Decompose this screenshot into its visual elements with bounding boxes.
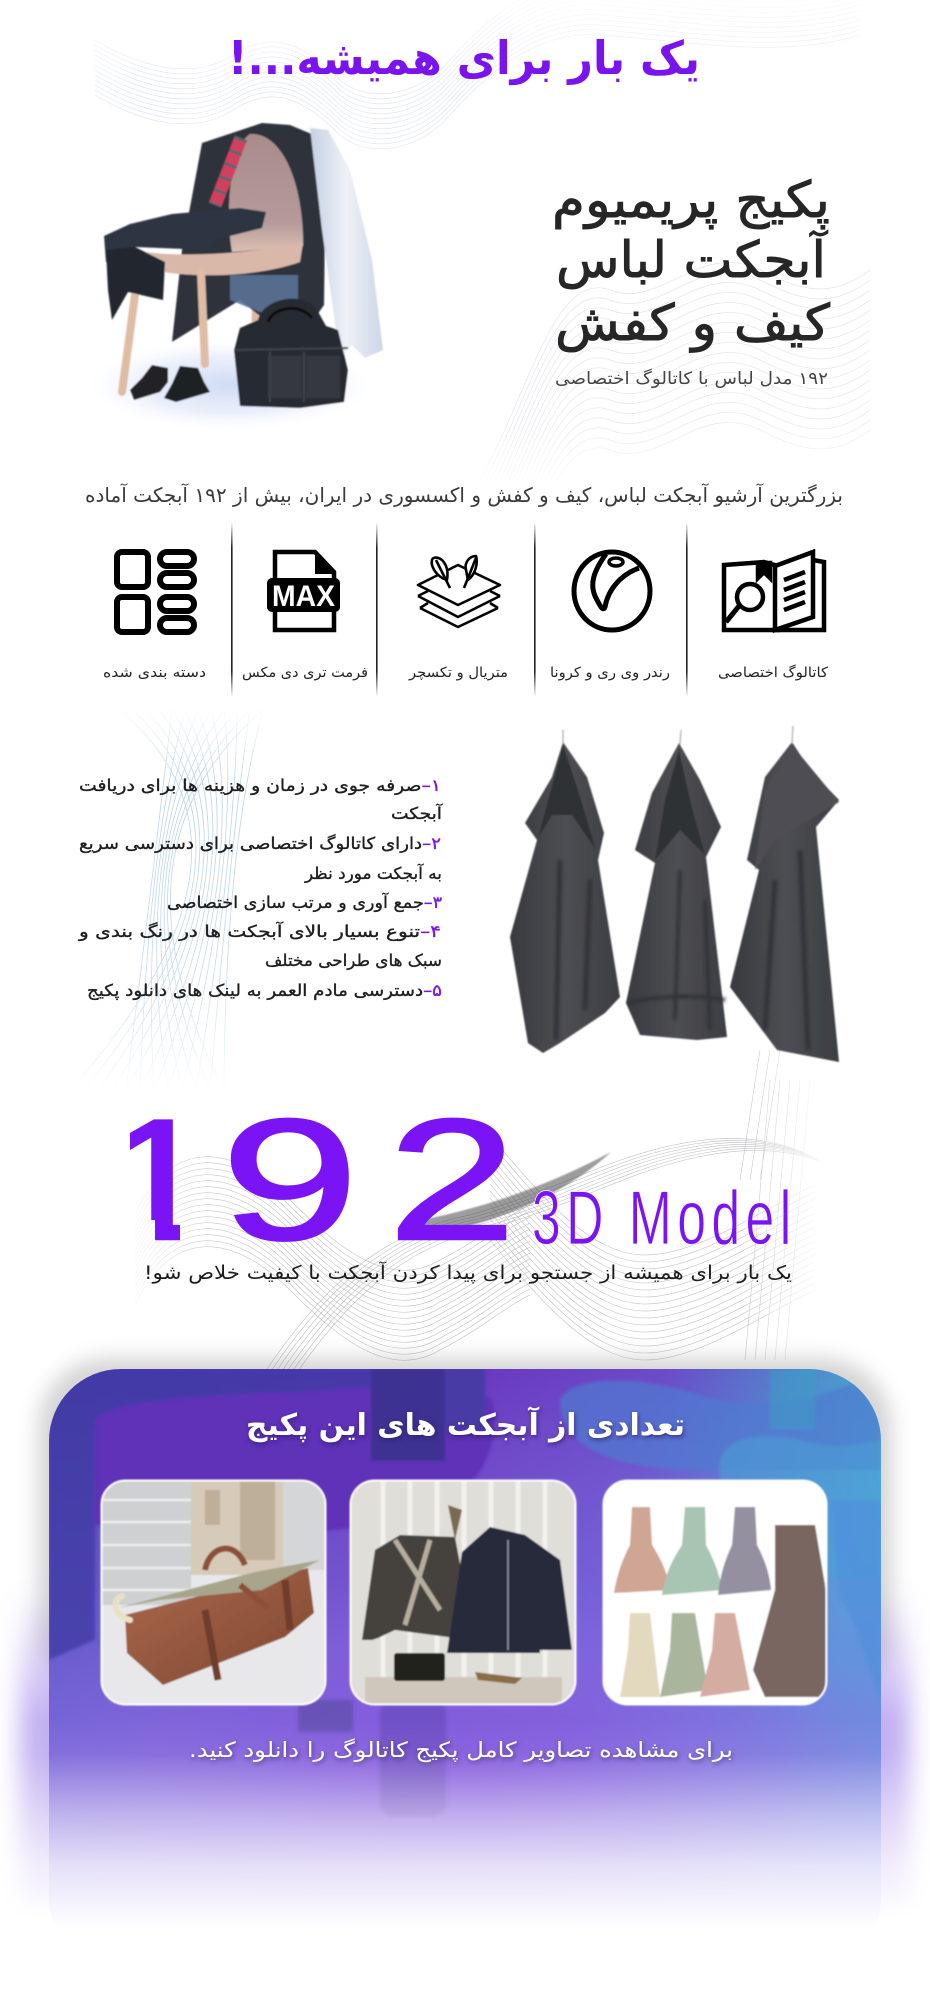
- white shirt: [310, 128, 383, 360]
- bottom fade to white: [0, 1715, 930, 1930]
- big number 192: 2: [388, 1084, 516, 1276]
- big number 192: [130, 1118, 506, 1242]
- icon: max file: MAX: [272, 580, 335, 613]
- folded jacket: [104, 208, 266, 262]
- blue shirt shade: [230, 275, 298, 322]
- chair back: [229, 134, 303, 252]
- divider lines: [231, 522, 688, 697]
- item 5: ۵–دسترسی مادم العمر به لینک های دانلود پکیج: [87, 981, 442, 1001]
- background: right wave mesh: [486, 262, 870, 468]
- heading: package name: پکیج پریمیوم: [552, 171, 830, 230]
- label: فرمت تری دی مکس: [242, 665, 368, 681]
- item 4: ۴–تنوع بسیار بالای آبجکت ها در رنگ بندی و: [78, 922, 441, 942]
- hoodie 1: [510, 730, 620, 1053]
- item 3: ۳–جمع آوری و مرتب سازی اختصاصی: [167, 893, 442, 913]
- hanging jacket: [172, 123, 326, 345]
- image: chair with clothes, bag and shoes: [80, 123, 383, 433]
- intro sentence: بزرگترین آرشیو آبجکت لباس، کیف و کفش و اکسسوری در ایران، بیش از ۱۹۲ آبجکت آماده: [85, 482, 843, 507]
- feature: categorized: [103, 552, 206, 681]
- background: dark ribbon fold: [409, 1152, 611, 1238]
- label: رندر وی ری و کرونا: [550, 665, 670, 681]
- item 2: ۲–دارای کاتالوگ اختصاصی برای دسترسی سریع: [79, 833, 441, 854]
- leather bag: [234, 299, 348, 408]
- benefits list: به آبجکت مورد نظر: [304, 864, 442, 884]
- big number 192: 9: [221, 1084, 359, 1276]
- label: متریال و تکسچر: [408, 665, 508, 681]
- image: three hanging hoodies: [510, 726, 839, 1062]
- label: کاتالوگ اختصاصی: [718, 663, 828, 681]
- front chair legs: [122, 265, 205, 392]
- panel shadow: [38, 1358, 892, 1698]
- item 1: ۱–صرفه جوی در زمان و هزینه ها برای دریافت: [79, 776, 441, 796]
- panel: sample objects: [5, 1350, 925, 1912]
- heading: package name: کیف و کفش: [555, 294, 830, 353]
- label: دسته بندی شده: [103, 665, 206, 681]
- tie: [215, 138, 241, 205]
- heading: package name: آبجکت لباس: [556, 230, 828, 289]
- benefits list: سبک های طراحی مختلف: [265, 951, 442, 971]
- background: lower grey wave mesh: [135, 1050, 839, 1384]
- big number 192: 1: [100, 1083, 217, 1276]
- rear chair legs: [255, 263, 302, 320]
- benefits list: [78, 776, 444, 1001]
- panel background: [49, 1369, 881, 1895]
- feature: v-ray and corona render: [550, 552, 670, 681]
- seat: [134, 243, 303, 275]
- hoodie 3: [730, 726, 839, 1062]
- icon: category grid: [117, 552, 194, 632]
- icon: open catalog book: [724, 552, 824, 630]
- feature: 3ds max format: [242, 550, 368, 681]
- photo: jackets on hooks: [350, 1480, 576, 1705]
- feature: material and texture: [408, 556, 508, 681]
- 3D Model label: 3D Model: [532, 1175, 797, 1260]
- shoes: [130, 365, 168, 400]
- icon: layers and leaves: [418, 556, 500, 627]
- heading: package name: [552, 171, 830, 353]
- tagline: یک بار برای همیشه از جستجو برای پیدا کردن آبجکت با کیفیت خلاص شو!: [144, 1260, 792, 1284]
- benefits list: آبجکت: [391, 804, 444, 823]
- hoodie 2: [626, 730, 727, 1040]
- photo: leather bag: [101, 1480, 326, 1705]
- subtitle: ۱۹۲ مدل لباس با کاتالوگ اختصاصی: [555, 368, 828, 389]
- title: یک بار برای همیشه...!: [228, 31, 700, 85]
- panel heading: تعدادی از آبجکت های این پکیج: [246, 1406, 685, 1443]
- feature: exclusive catalog: [718, 552, 828, 681]
- icon: v-ray circle: [574, 552, 650, 630]
- panel footer text: برای مشاهده تصاویر کامل پکیج کاتالوگ را دانلود کنید.: [189, 1738, 733, 1762]
- panel side glow: [20, 1590, 910, 1910]
- background: top wave mesh: [95, 0, 860, 149]
- background: left crossing blue mesh: [81, 714, 262, 1078]
- photo: dresses: [603, 1480, 827, 1705]
